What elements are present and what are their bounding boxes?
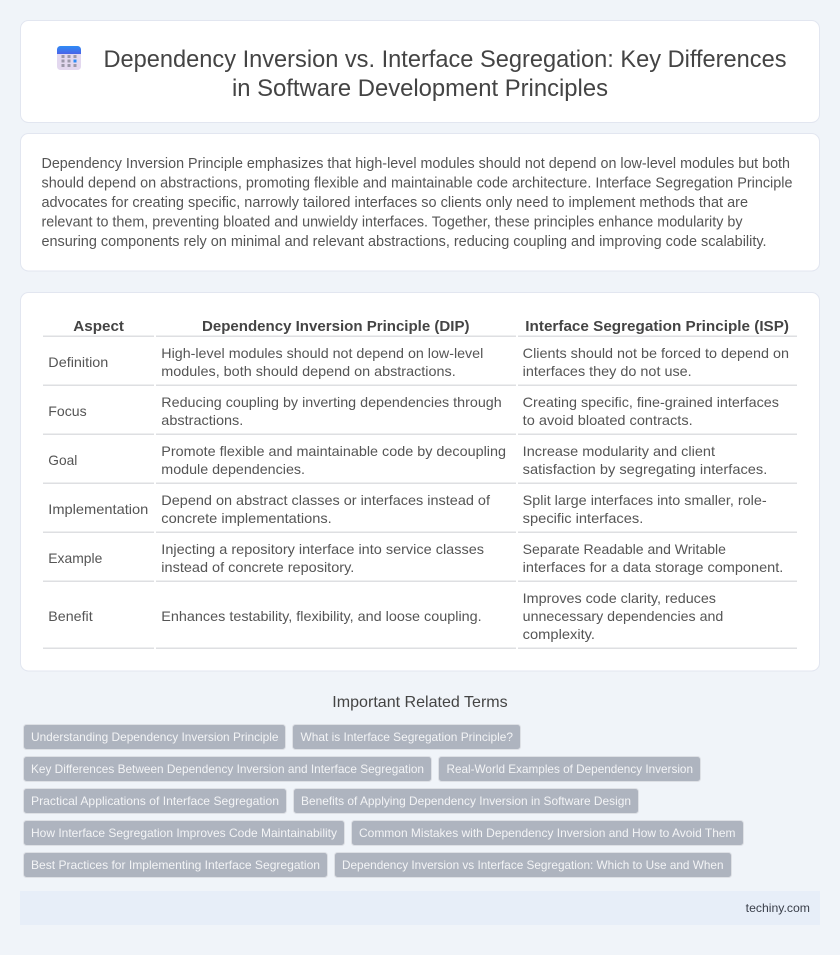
row: Definition: modules, both should depend on abstractions.	[161, 363, 456, 379]
text block: summary paragraph: should depend on abstractions, promoting flexible and maintainable code architecture. Interface Segregation Principle	[42, 176, 792, 192]
row: Goal	[43, 443, 797, 484]
panel: comparison table	[20, 292, 820, 671]
row: Focus: to avoid bloated contracts.	[523, 412, 693, 428]
text block: summary paragraph	[42, 156, 792, 250]
row: Implementation: Depend on abstract classes or interfaces instead of	[161, 492, 490, 508]
footer: techiny.com	[746, 901, 810, 915]
row: Goal: module dependencies.	[161, 461, 305, 477]
title: in Software Development Principles	[232, 75, 608, 102]
row: Focus	[43, 394, 797, 435]
row: Focus: Reducing coupling by inverting dependencies through	[161, 394, 502, 410]
chip	[24, 820, 344, 846]
title	[104, 46, 786, 102]
chip: How Interface Segregation Improves Code Maintainability	[31, 826, 337, 840]
chip: Practical Applications of Interface Segregation	[31, 794, 279, 808]
panel: related term chips	[24, 724, 744, 878]
row: Goal: Goal	[48, 452, 77, 468]
row: Implementation: concrete implementations.	[161, 510, 332, 526]
row: Example: Separate Readable and Writable	[523, 541, 726, 557]
row: Example: Example	[48, 550, 103, 566]
row: Implementation	[43, 492, 797, 533]
chip	[352, 820, 744, 846]
chip	[292, 724, 520, 750]
row: Benefit: Improves code clarity, reduces	[523, 590, 716, 606]
table header: Interface Segregation Principle (ISP)	[525, 318, 789, 335]
row: Example: instead of concrete repository.	[161, 559, 354, 575]
row: Implementation: Implementation	[48, 501, 148, 517]
table header: Dependency Inversion Principle (DIP)	[202, 318, 470, 335]
row: Goal: Increase modularity and client	[523, 443, 715, 459]
chip	[24, 724, 286, 750]
row: Goal: satisfaction by segregating interfaces.	[523, 461, 767, 477]
row: Focus: Focus	[48, 403, 87, 419]
row: Implementation: specific interfaces.	[523, 510, 643, 526]
title: Dependency Inversion vs. Interface Segregation: Key Differences	[104, 46, 786, 73]
text block: summary paragraph: advocates for creating specific, narrowly tailored interfaces so clients only need to implement methods that are	[42, 195, 748, 211]
chip	[334, 852, 732, 878]
heading: Important Related Terms: Important Related Terms	[332, 694, 508, 711]
panel: header	[20, 20, 820, 122]
chip: Common Mistakes with Dependency Inversion and How to Avoid Them	[359, 826, 736, 840]
chip: Benefits of Applying Dependency Inversion in Software Design	[301, 794, 631, 808]
chip	[294, 788, 638, 814]
chip: Dependency Inversion vs Interface Segregation: Which to Use and When	[342, 858, 724, 872]
chip: Real-World Examples of Dependency Inversion	[446, 762, 693, 776]
text block: summary paragraph: ensuring components rely on minimal and relevant abstractions, reducing coupling and improving code scalability.	[42, 234, 766, 250]
footer	[20, 891, 820, 925]
row: Definition: High-level modules should not depend on low-level	[161, 345, 483, 361]
row: Example	[43, 541, 797, 582]
row: Example: Injecting a repository interface into service classes	[161, 541, 484, 557]
row: Definition	[43, 345, 797, 386]
row: Benefit: complexity.	[523, 626, 595, 642]
chip	[438, 756, 700, 782]
chip	[24, 788, 286, 814]
row: Definition: Clients should not be forced to depend on	[523, 345, 789, 361]
chip	[24, 852, 328, 878]
chip: Best Practices for Implementing Interface Segregation	[31, 858, 320, 872]
row: Benefit: unnecessary dependencies and	[523, 608, 723, 624]
icon: calendar	[57, 46, 81, 70]
row: Definition: Definition	[48, 354, 108, 370]
row: Implementation: Split large interfaces into smaller, role-	[523, 492, 767, 508]
row: Benefit: Benefit	[48, 608, 93, 624]
chip	[24, 756, 432, 782]
chip: Understanding Dependency Inversion Principle	[31, 730, 279, 744]
row: Benefit: Enhances testability, flexibility, and loose coupling.	[161, 608, 482, 624]
text block: summary paragraph: relevant to them, preventing bloated and unwieldy interfaces. Together, these principles enhance modularity by	[42, 214, 743, 230]
text block: summary paragraph: Dependency Inversion Principle emphasizes that high-level modules should not depend on low-level modules but both	[42, 156, 790, 172]
row: Example: interfaces for a data storage component.	[523, 559, 783, 575]
row: Definition: interfaces they do not use.	[523, 363, 692, 379]
row: Focus: Creating specific, fine-grained interfaces	[523, 394, 779, 410]
chip: Key Differences Between Dependency Inversion and Interface Segregation	[31, 762, 424, 776]
chip: What is Interface Segregation Principle?	[300, 730, 513, 744]
row: Benefit	[43, 590, 797, 649]
panel: description	[20, 134, 820, 271]
row: Goal: Promote flexible and maintainable code by decoupling	[161, 443, 506, 459]
table header: Aspect	[73, 318, 124, 335]
row: Focus: abstractions.	[161, 412, 243, 428]
table header	[43, 318, 797, 337]
